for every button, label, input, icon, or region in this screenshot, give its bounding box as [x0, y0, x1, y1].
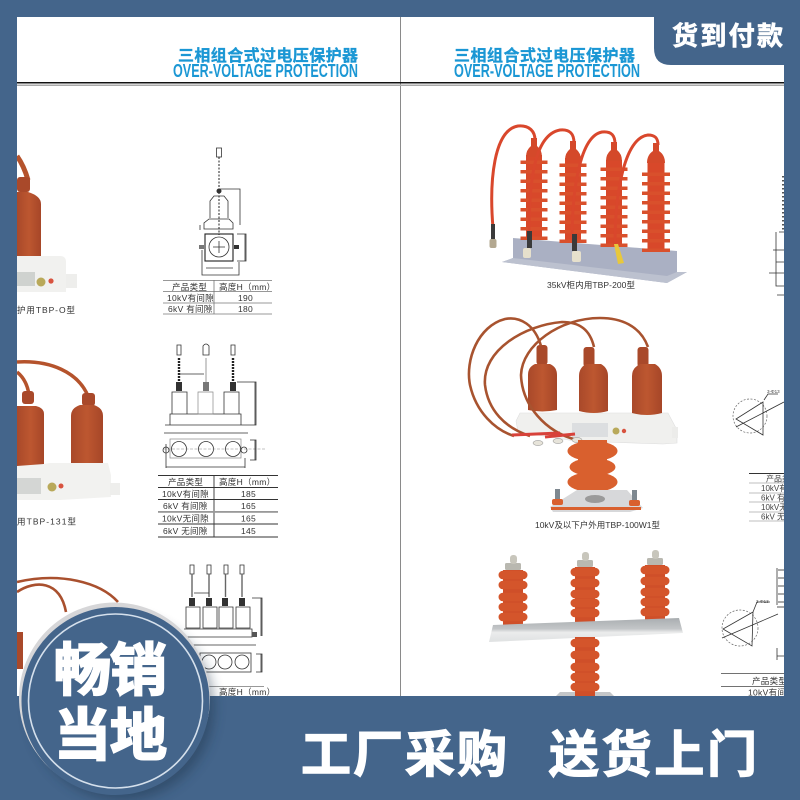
base plate and bolts [550, 490, 643, 512]
line drawing: four-phase arrester [184, 565, 262, 672]
table: TBP-100W1 heights (cut off): 6kV 有间隙 [761, 492, 800, 502]
red leads and lugs [512, 433, 575, 437]
badge: best seller locally [19, 602, 214, 800]
caption: TBP-131: 用TBP-131型 [17, 516, 76, 526]
slogan: delivered to door: 送货上门 [549, 727, 757, 783]
mounting bracket [502, 238, 687, 283]
table: TBP-100W1 heights (cut off): 产品类型 [766, 474, 798, 484]
table: TBP-O heights: 6kV 有间隙 [168, 304, 213, 314]
insulator columns [526, 138, 665, 252]
table: three-column heights (cut off) [721, 674, 795, 698]
line drawing: three-column triangle plan [722, 568, 784, 660]
insulator stacks [498, 565, 670, 627]
header rule [17, 82, 784, 86]
tab: cash on delivery [654, 17, 800, 65]
table: TBP-131 heights: 6kV 有间隙 [163, 501, 208, 511]
line drawing: TBP-100W1 triangle plan: 3-Φ13 [767, 389, 780, 394]
line drawing: TBP-O [199, 148, 246, 275]
line drawing: TBP-200 (cut off) [769, 176, 784, 295]
connecting cables [492, 126, 658, 245]
table: TBP-131 heights: 10kV无间隙 [162, 514, 209, 524]
table: TBP-131 heights: 10kV有间隙 [162, 489, 209, 499]
heading: right page [454, 46, 640, 81]
caption: TBP-O: 护用TBP-O型 [17, 305, 75, 315]
table: TBP-O heights: 高度H（mm） [219, 282, 275, 292]
left English title: OVER-VOLTAGE PROTECTION [173, 61, 358, 81]
table: TBP-O heights [163, 280, 275, 314]
table: TBP-100W1 heights (cut off) [749, 474, 800, 522]
table: TBP-131 heights: 185 [241, 489, 256, 499]
lower stack [570, 637, 600, 696]
left Chinese title: 三相组合式过电压保护器 [178, 46, 358, 65]
table: TBP-O heights: 10kV有间隙 [167, 293, 214, 303]
table: TBP-131 heights: 6kV 无间隙 [163, 526, 208, 536]
table: TBP-100W1 heights (cut off): 6kV 无间隙 [761, 512, 800, 522]
table: TBP-O heights: 190 [238, 293, 253, 303]
product photo: TBP-O arrester [17, 156, 77, 292]
caption: TBP-200: 35kV柜内用TBP-200型 [547, 280, 635, 290]
table: TBP-131 heights: 产品类型 [168, 477, 203, 487]
table: TBP-O heights: 产品类型 [172, 282, 207, 292]
product photo: TBP-200 four-column arrester [490, 126, 687, 283]
table: three-column heights (cut off): 10kV有间隙 [748, 688, 795, 698]
three brown cylinders [528, 345, 662, 415]
table: four-phase heights (cut off): 高度H（mm） [219, 687, 275, 697]
metal caps [505, 550, 663, 570]
cable lugs [490, 224, 624, 264]
heading: left page [173, 46, 358, 81]
table: TBP-131 heights: 165 [241, 501, 256, 511]
product photo: partial arrester behind badge [17, 578, 118, 669]
caption: TBP-100W1: 10kV及以下户外用TBP-100W1型 [535, 520, 660, 530]
line drawing: three-column triangle plan: 3-Φ13 [756, 599, 769, 604]
table: three-column heights (cut off): 产品类型 [752, 676, 787, 686]
looping cables [469, 318, 648, 440]
lower insulator [568, 440, 618, 492]
right Chinese title: 三相组合式过电压保护器 [454, 46, 635, 65]
table: TBP-O heights: 180 [238, 304, 253, 314]
product photo: TBP-100W1 arrester [469, 318, 678, 512]
table: TBP-131 heights: 145 [241, 526, 256, 536]
product photo: TBP-131 arrester [17, 362, 120, 500]
white surge module [516, 413, 677, 444]
badge line 2: 当地 [54, 704, 167, 768]
right English title: OVER-VOLTAGE PROTECTION [454, 61, 640, 81]
crossbar [489, 618, 683, 642]
table: TBP-131 heights [158, 475, 278, 537]
centre fold line [400, 17, 401, 696]
table: TBP-131 heights: 高度H（mm） [219, 477, 275, 487]
line drawing: TBP-100W1 triangle plan [733, 389, 784, 435]
slogan: factory purchase: 工厂采购 [301, 727, 507, 783]
line drawing: TBP-131 [163, 344, 266, 468]
tab label: 货到付款 [672, 21, 783, 51]
table: TBP-131 heights: 165 [241, 514, 256, 524]
product photo: three-column arrester on crossbar [489, 550, 683, 696]
badge line 1: 畅销 [54, 639, 167, 703]
